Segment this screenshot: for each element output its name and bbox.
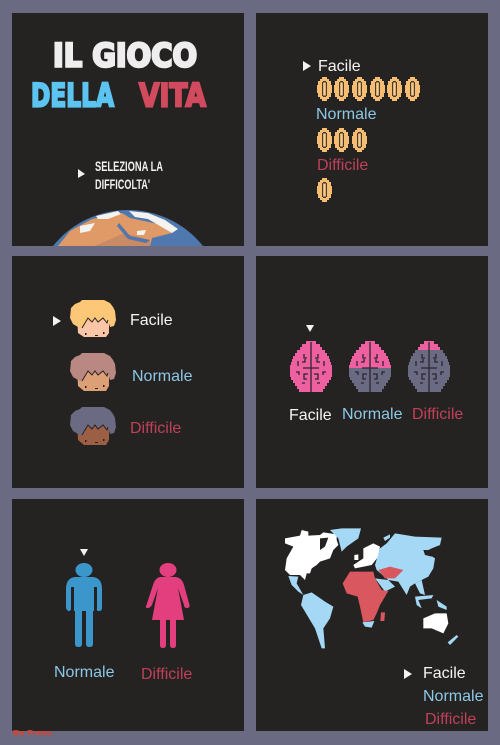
icon: selection arrow (306, 325, 314, 332)
panel: brains (256, 256, 488, 488)
label: normale: Normale (54, 664, 115, 681)
brain: full (290, 341, 332, 392)
icon: selection arrow (53, 316, 61, 326)
label: difficile: Difficile (141, 666, 192, 683)
label: facile: Facile (318, 58, 361, 75)
title: il gioco: IL GIOCO (53, 36, 197, 74)
coins: six (317, 77, 420, 101)
panel: title screen (12, 13, 244, 246)
icon: selection arrow (80, 549, 88, 556)
text: select difficulty: SELEZIONA LA (95, 158, 163, 174)
world map (285, 528, 458, 648)
icon: selection arrow (404, 669, 412, 679)
text: select difficulty (95, 158, 163, 192)
label: difficile: Difficile (412, 406, 463, 423)
icon: selection arrow (78, 169, 85, 178)
label: facile: Facile (130, 312, 173, 329)
label: normale: Normale (316, 106, 377, 123)
label: normale: Normale (132, 368, 193, 385)
label: facile: Facile (423, 665, 466, 682)
title: della: DELLA (31, 76, 114, 114)
icon: man (66, 563, 102, 647)
brain: low (408, 341, 450, 392)
coins: three (317, 128, 367, 152)
icon: woman (146, 563, 190, 648)
label: normale: Normale (342, 406, 403, 423)
icon: selection arrow (303, 61, 311, 71)
face: dark (70, 407, 116, 445)
title: vita: VITA (139, 76, 206, 114)
face: medium (70, 353, 116, 391)
panel: skin colour (12, 256, 244, 488)
coins: one (317, 178, 332, 202)
text: select difficulty: DIFFICOLTA' (95, 176, 150, 192)
label: difficile: Difficile (130, 420, 181, 437)
brain: half (349, 341, 391, 392)
label: facile: Facile (289, 407, 332, 424)
label: difficile: Difficile (317, 157, 368, 174)
panel: gender (12, 499, 244, 737)
panel: world map (256, 499, 488, 731)
illustration: earth (53, 210, 203, 246)
panel: coins (256, 13, 488, 246)
credit: By Fraso (13, 730, 52, 737)
label: normale: Normale (423, 688, 484, 705)
face: light (70, 300, 116, 337)
label: difficile: Difficile (425, 711, 476, 728)
